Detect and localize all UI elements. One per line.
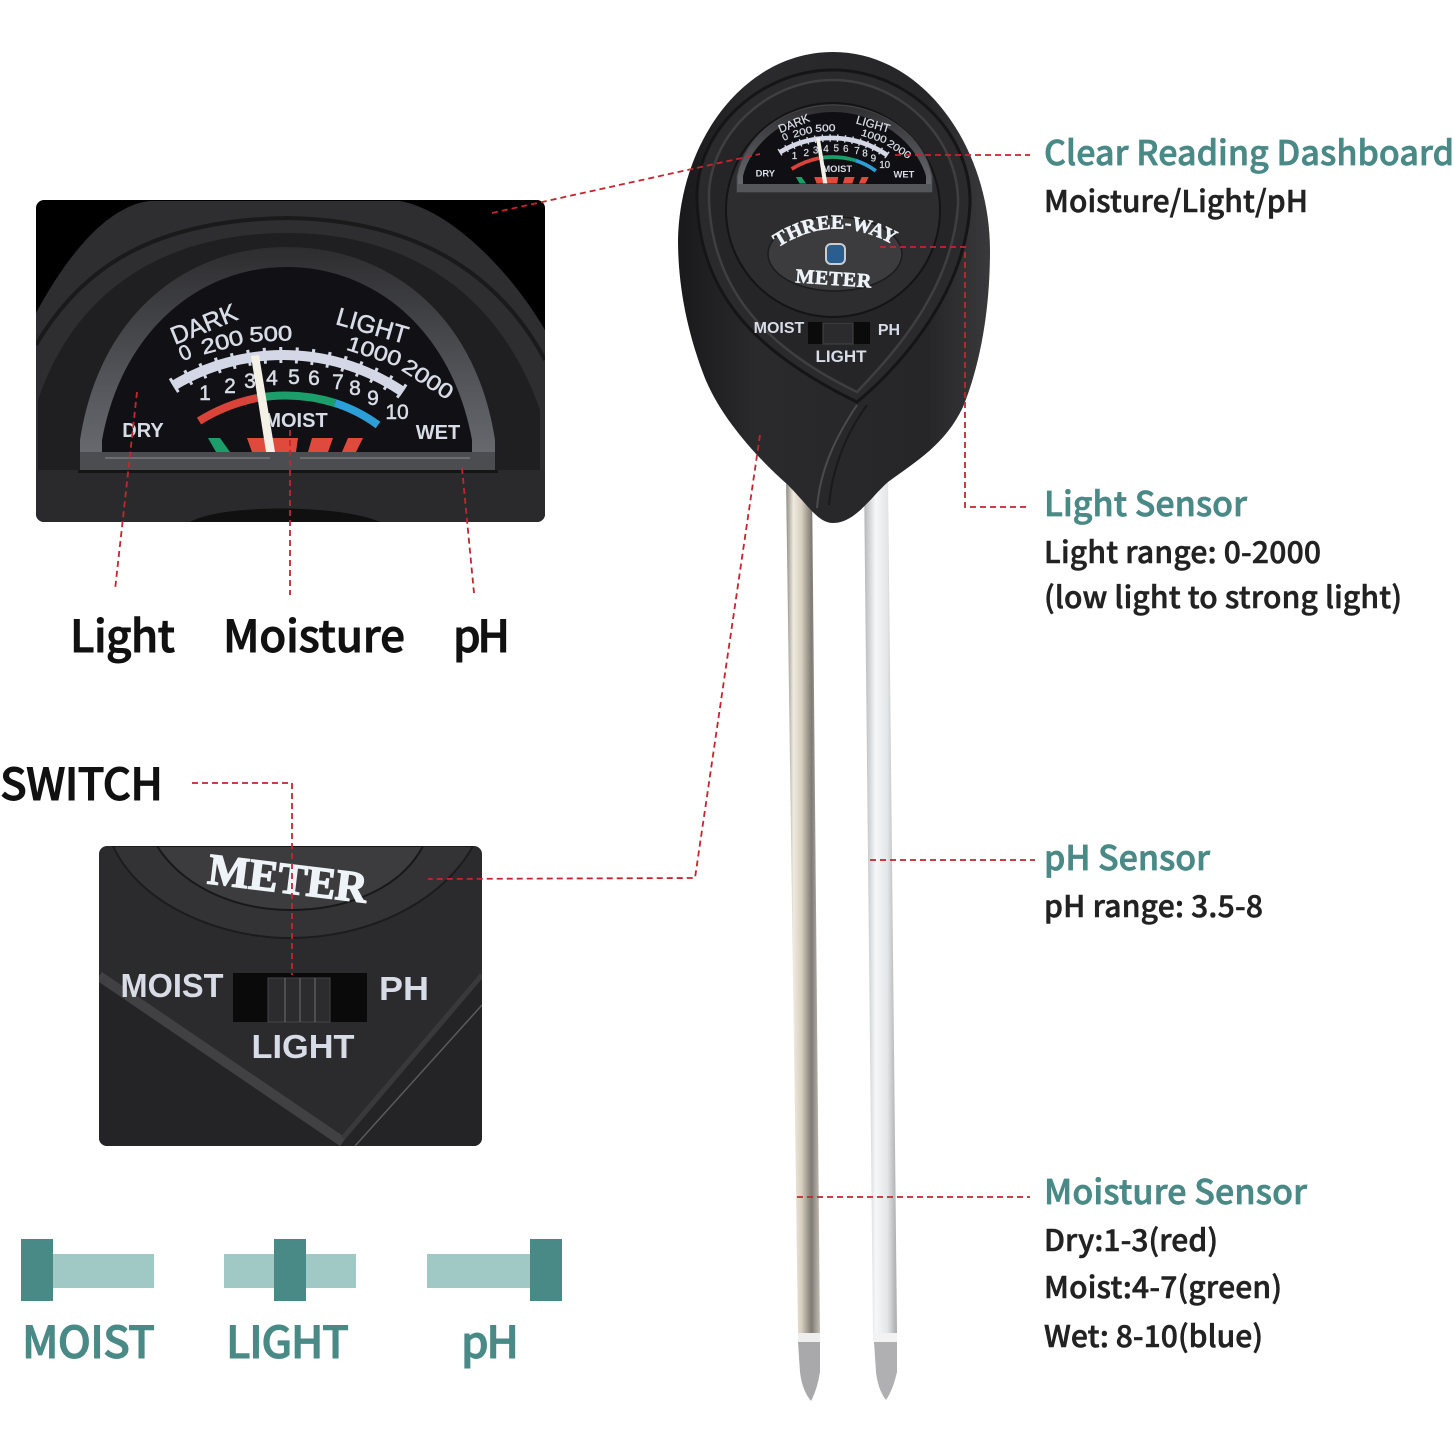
light sensor oval: THREE-WAY — [771, 215, 899, 246]
meter body — [678, 52, 990, 523]
meter probe: right pH sensor — [864, 478, 897, 1400]
small switch with labels: MOIST — [754, 320, 805, 337]
small dial window: DARK — [777, 112, 812, 136]
slider position: moist: MOIST — [22, 1307, 155, 1371]
gauge scale: 4 — [266, 367, 278, 390]
small dial window: 200 — [792, 125, 815, 141]
callout: moisture sensor: Dry:1-3(red) — [1044, 1216, 1218, 1260]
dial labels — [70, 601, 510, 665]
gauge scale: 1000 — [344, 332, 404, 371]
gauge scale: 2000 — [398, 355, 457, 404]
small switch with labels: LIGHT — [816, 347, 867, 366]
gauge scale: 500 — [249, 322, 293, 347]
small dial window: 1000 — [860, 128, 889, 146]
callout: moisture sensor — [1044, 1165, 1307, 1356]
small dial window: 3 — [813, 145, 819, 156]
gauge scale: 0 — [175, 340, 195, 366]
switch labels: MOIST — [120, 967, 224, 1004]
slider position: light: LIGHT — [226, 1307, 349, 1371]
small dial window: 10 — [879, 160, 891, 171]
gauge scale: 10 — [385, 401, 409, 424]
gauge scale: 6 — [308, 367, 320, 390]
small switch with labels: PH — [878, 322, 900, 339]
callout: clear reading dashboard: Clear Reading Dashboard — [1044, 126, 1454, 175]
small dial window: 2000 — [885, 138, 913, 162]
gauge scale: LIGHT — [333, 303, 411, 350]
switch heading: SWITCH — [0, 749, 163, 813]
small dial window: 9 — [871, 153, 877, 164]
dial face ring — [726, 103, 940, 317]
small dial window: WET — [894, 168, 915, 179]
small dial window — [737, 105, 932, 192]
small dial window: DRY — [756, 167, 776, 178]
callout: clear reading dashboard: Moisture/Light/pH — [1044, 177, 1308, 221]
gauge scale: 200 — [199, 326, 246, 359]
gauge scale: 2 — [224, 375, 236, 398]
small switch with labels — [754, 320, 900, 366]
small dial window: MOIST — [822, 163, 852, 174]
gauge scale: 1 — [199, 382, 211, 405]
switch labels: LIGHT — [252, 1028, 354, 1065]
small dial window: 4 — [823, 144, 829, 155]
inset: dial close-up — [36, 200, 545, 522]
gauge scale — [122, 298, 460, 452]
small dial window: 8 — [862, 149, 868, 160]
small dial window: LIGHT — [855, 114, 891, 136]
teardrop inner bevel — [697, 70, 970, 508]
callout: pH sensor — [1044, 831, 1263, 926]
slider position: moist — [21, 1239, 155, 1371]
callout: clear reading dashboard — [1044, 126, 1454, 221]
gauge scale: MOIST — [264, 410, 328, 432]
small dial window: 1 — [792, 151, 797, 162]
METER lettering: METER — [205, 845, 371, 913]
dial labels: Moisture — [223, 601, 405, 665]
callout: pH sensor: pH range: 3.5-8 — [1044, 882, 1263, 926]
small dial window: 0 — [781, 131, 791, 144]
gauge scale: 9 — [367, 387, 379, 410]
gauge scale: 7 — [332, 371, 344, 394]
switch track and knob — [233, 973, 367, 1022]
slider position: light — [224, 1239, 356, 1371]
callout: pH sensor: pH Sensor — [1044, 831, 1210, 880]
slider position: pH — [427, 1239, 562, 1371]
gauge scale: DARK — [167, 298, 242, 351]
slider position: pH: pH — [461, 1307, 519, 1371]
gauge scale: 3 — [244, 370, 256, 393]
small dial window: 7 — [854, 146, 860, 157]
dial labels: pH — [453, 601, 510, 665]
light sensor oval: METER — [795, 265, 873, 293]
switch labels — [122, 974, 427, 1058]
callout: light sensor — [1044, 477, 1402, 617]
callout: light sensor: Light range: 0-2000 — [1044, 528, 1321, 572]
callout: moisture sensor: Moist:4-7(green) — [1044, 1263, 1282, 1307]
callout: light sensor: (low light to strong light) — [1044, 573, 1402, 617]
small dial window: 5 — [834, 144, 840, 155]
gauge scale: DRY — [122, 420, 164, 442]
gauge scale: 8 — [349, 377, 361, 400]
callout: moisture sensor: Wet: 8-10(blue) — [1044, 1312, 1263, 1356]
small dial window: 500 — [815, 123, 836, 135]
inset: switch close-up — [99, 845, 482, 1146]
leader lines — [115, 154, 1035, 1197]
small dial window: 2 — [803, 148, 809, 159]
small dial window: 6 — [843, 144, 849, 155]
dial labels: Light — [70, 601, 175, 665]
light sensor oval — [767, 215, 903, 293]
callout: moisture sensor: Moisture Sensor — [1044, 1165, 1307, 1214]
meter probe: left moisture sensor — [786, 478, 820, 1401]
switch labels: PH — [379, 970, 429, 1007]
gauge scale: WET — [416, 422, 460, 444]
callout: light sensor: Light Sensor — [1044, 477, 1247, 526]
gauge scale: 5 — [288, 366, 300, 389]
